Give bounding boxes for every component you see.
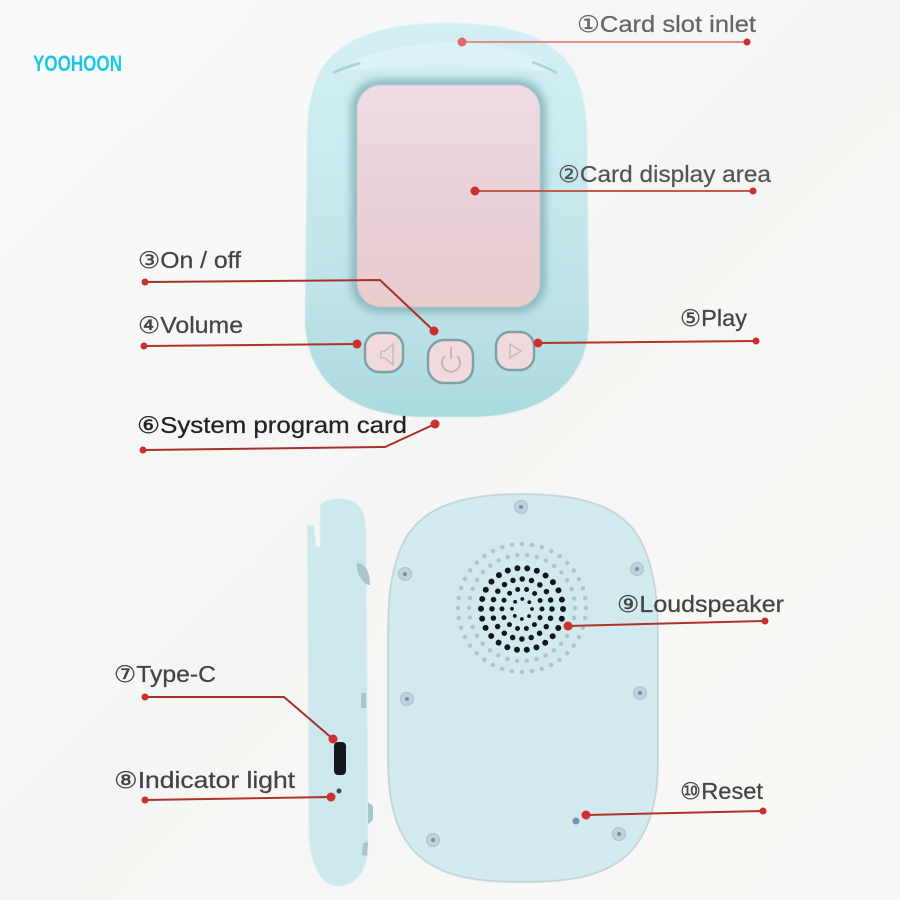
play button: [496, 332, 534, 370]
brand logo: YOOHOON: [33, 51, 122, 76]
callout lines: [143, 42, 765, 815]
label 7: ⑦Type-C: [114, 661, 216, 687]
volume button: [365, 333, 403, 372]
card slot inlet: [330, 42, 560, 74]
reset hole: [572, 818, 580, 824]
indicator light: [336, 788, 342, 794]
label 5: ⑤Play: [680, 305, 747, 331]
side view of device: [307, 499, 373, 886]
label 4: ④Volume: [138, 312, 243, 338]
dark speaker holes: [481, 568, 563, 650]
screw centres: [403, 505, 642, 842]
side buttons: [357, 563, 373, 856]
side body: [307, 499, 368, 886]
power button: [428, 340, 473, 383]
screen recess shadow: [351, 79, 546, 313]
device body: [305, 23, 589, 417]
screws: [398, 500, 646, 846]
type-c port: [334, 742, 346, 775]
label 8: ⑧Indicator light: [114, 767, 296, 793]
back view of device: [388, 494, 658, 882]
label 3: ③On / off: [138, 247, 242, 273]
label 9: ⑨Loudspeaker: [617, 591, 784, 617]
label 2: ②Card display area: [558, 161, 771, 187]
callout dots: [140, 38, 768, 820]
front view of device: [305, 23, 589, 417]
label 6: ⑥System program card: [137, 412, 407, 438]
outer light speaker holes: [458, 544, 586, 672]
card display area: [357, 85, 540, 307]
label 1: ①Card slot inlet: [577, 11, 757, 37]
back body: [388, 494, 658, 882]
label 10: ⑩Reset: [680, 778, 764, 804]
